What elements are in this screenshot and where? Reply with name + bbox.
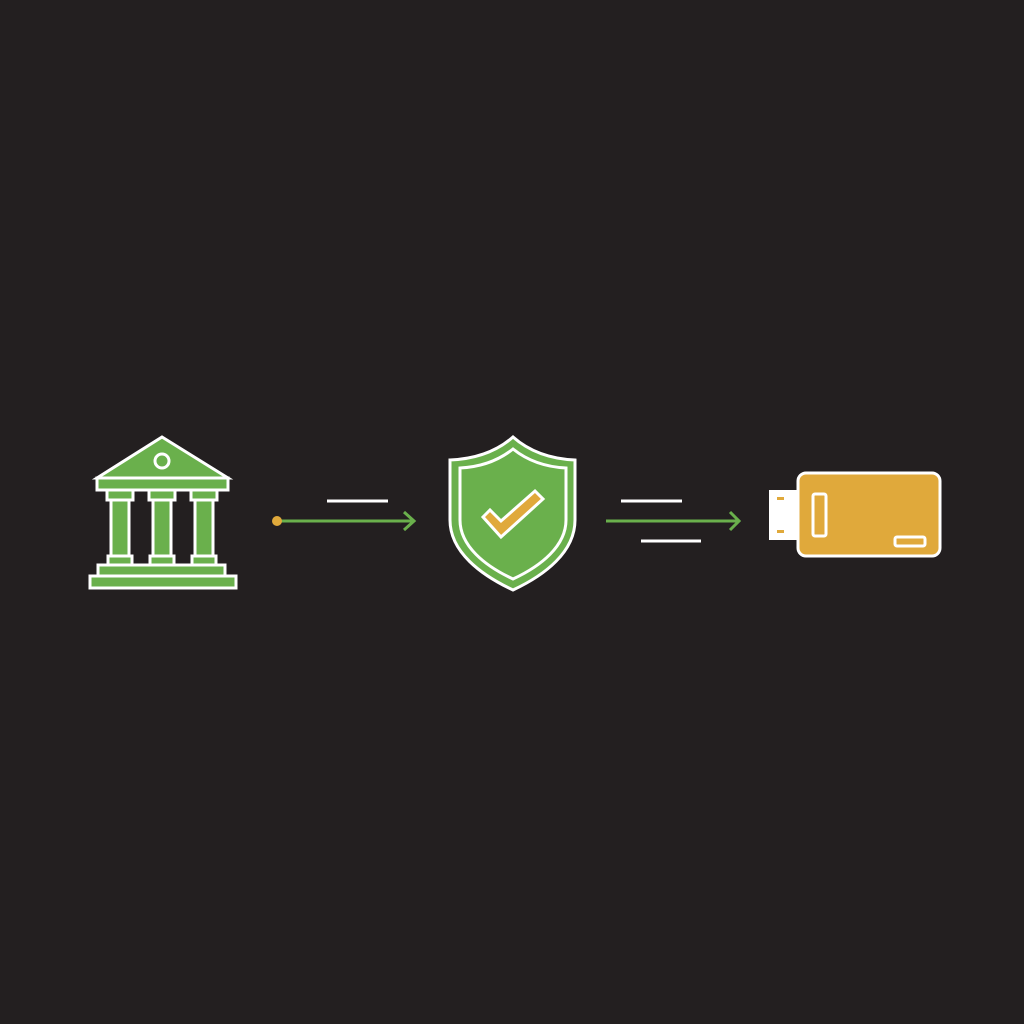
arrow: shield to card: [606, 501, 739, 541]
arrow: bank to shield: [272, 501, 414, 530]
icon: bank building: [90, 437, 236, 588]
icon: shield with check: [450, 437, 575, 590]
icon: usb drive: [769, 473, 940, 556]
